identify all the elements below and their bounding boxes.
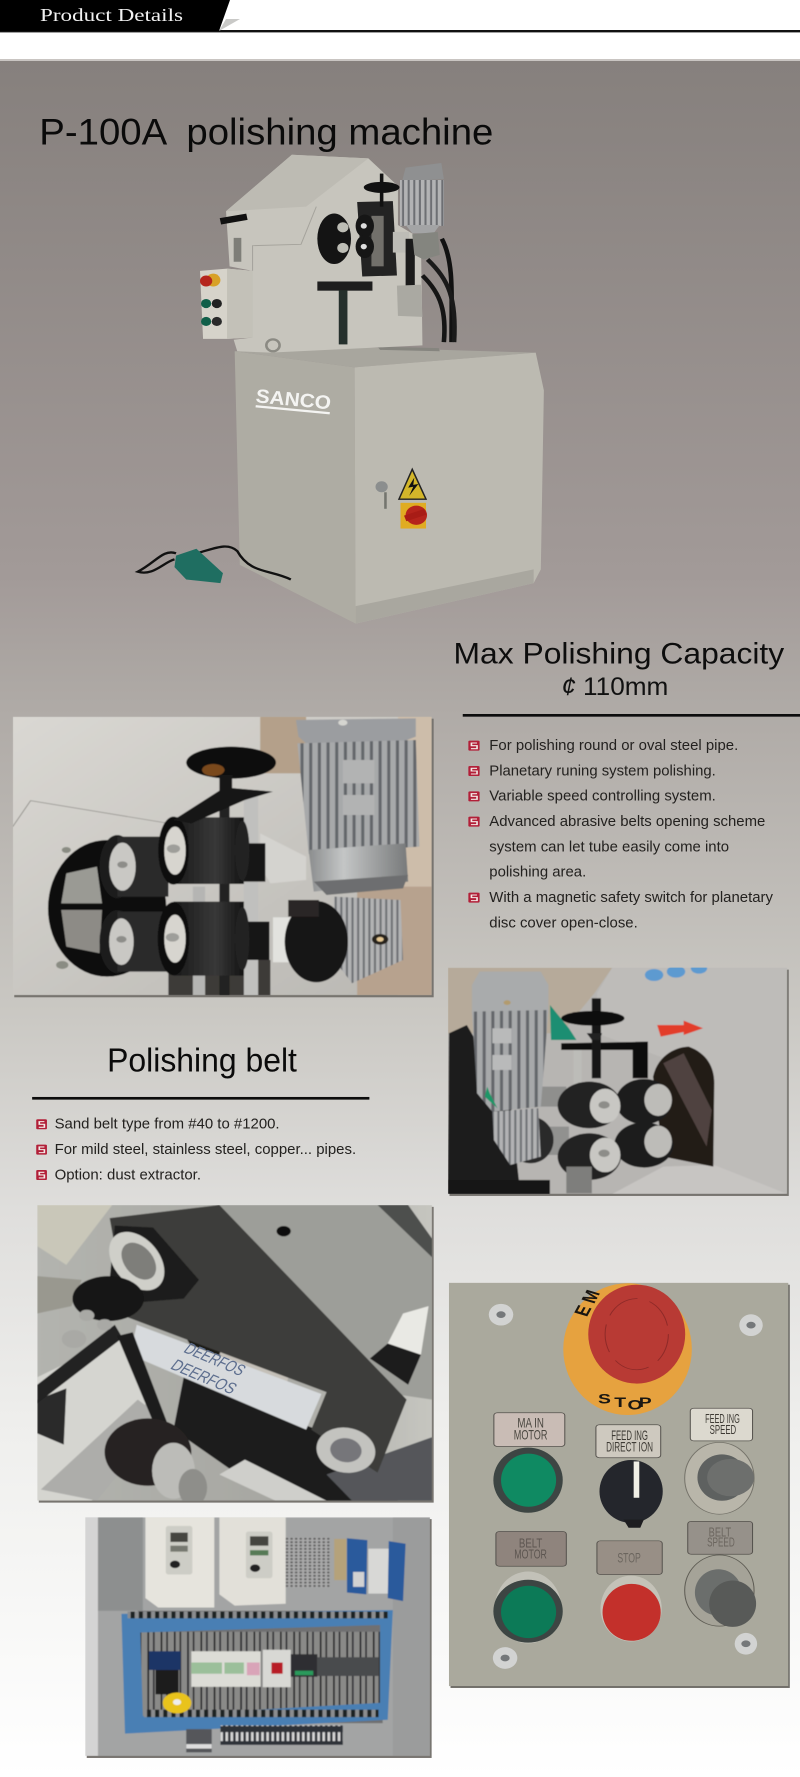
blue wiring frame xyxy=(121,1610,393,1734)
list: machine features xyxy=(468,738,773,931)
heading: max polishing capacity: Max Polishing Capacity xyxy=(454,636,784,670)
machine: lower cabinet xyxy=(235,347,544,624)
belt bullet 1 xyxy=(36,1116,280,1132)
photo: motor and rollers close-up xyxy=(13,717,434,997)
machine and title block xyxy=(39,112,784,701)
bullet item 5 xyxy=(468,890,773,931)
bullet item 2 xyxy=(468,763,716,779)
bullet item 4: polishing area. xyxy=(489,864,586,881)
divider rule top right xyxy=(463,714,800,717)
inverter 1 xyxy=(145,1517,214,1607)
icon: panel screws xyxy=(489,1304,763,1669)
title: P-100A polishing machine xyxy=(39,112,493,153)
icon: feeding direction selector xyxy=(599,1460,663,1528)
bullet item 4 xyxy=(468,814,765,881)
ring text: stop: STOP xyxy=(598,1391,652,1413)
label: feeding speed: SPEED xyxy=(710,1423,736,1437)
label: belt speed: BELT xyxy=(709,1525,731,1540)
label: stop: STOP xyxy=(617,1551,641,1566)
belt brand text: DEERFOS xyxy=(180,1339,250,1379)
label: feeding direction: DIRECT ION xyxy=(606,1440,653,1455)
list: polishing belt features xyxy=(36,1116,356,1183)
photo: electrical cabinet xyxy=(85,1517,432,1758)
label: belt motor xyxy=(496,1531,566,1566)
label: belt speed xyxy=(688,1521,753,1554)
icon: belt motor green button xyxy=(493,1572,563,1643)
header: Product Details banner xyxy=(0,0,800,32)
label: belt motor: BELT xyxy=(519,1537,542,1551)
motor and hoses xyxy=(400,163,455,342)
divider rule left xyxy=(32,1097,369,1100)
icon: belt speed dial xyxy=(685,1555,756,1627)
label: belt speed: SPEED xyxy=(707,1536,735,1550)
label: belt motor: MOTOR xyxy=(514,1548,547,1562)
panel: control panel photo xyxy=(449,1283,790,1688)
photo: abrasive belt xyxy=(37,1205,434,1506)
belt bullet 3 xyxy=(36,1167,201,1183)
logo: SANCO: SANCO xyxy=(255,386,332,414)
label: feeding speed: FEED ING xyxy=(705,1412,740,1427)
label: feeding direction: FEED ING xyxy=(611,1428,648,1443)
label: feeding direction xyxy=(596,1425,661,1458)
belt bullet 2: For mild steel, stainless steel, copper... pipes. xyxy=(55,1142,356,1158)
icon: control box xyxy=(200,269,253,339)
icon: feeding speed dial xyxy=(685,1442,754,1514)
ring text: emergency: E M xyxy=(570,1288,605,1319)
icon: stop red button xyxy=(601,1576,662,1642)
capacity value: ¢ 110mm xyxy=(561,673,668,701)
belt bullet 3: Option: dust extractor. xyxy=(55,1167,201,1183)
machine: upper housing xyxy=(220,155,422,353)
icon: foot pedal with cable xyxy=(138,547,291,583)
header: Product Details banner: Product Details xyxy=(40,5,183,25)
label: stop xyxy=(597,1541,662,1575)
heading: polishing belt: Polishing belt xyxy=(107,1042,297,1079)
icon: emergency stop button xyxy=(563,1283,692,1415)
icon: main motor green button xyxy=(493,1448,563,1513)
inverter 2 xyxy=(219,1517,286,1606)
bullet item 5: disc cover open-close. xyxy=(489,915,638,931)
bullet item 3 xyxy=(468,788,716,805)
belt bullet 2 xyxy=(36,1142,356,1158)
icon: door lock, warning sign and main switch xyxy=(376,469,427,529)
label: main motor xyxy=(494,1413,565,1446)
label: main motor: MA IN xyxy=(517,1416,544,1431)
planetary roller assembly xyxy=(317,174,422,344)
label: main motor: MOTOR xyxy=(514,1428,547,1443)
belt bullet 1: Sand belt type from #40 to #1200. xyxy=(55,1116,280,1132)
photo: rollers with red arrow xyxy=(448,963,789,1196)
belt brand text repeat: DEERFOS xyxy=(167,1356,241,1397)
label: feeding speed xyxy=(690,1408,753,1441)
